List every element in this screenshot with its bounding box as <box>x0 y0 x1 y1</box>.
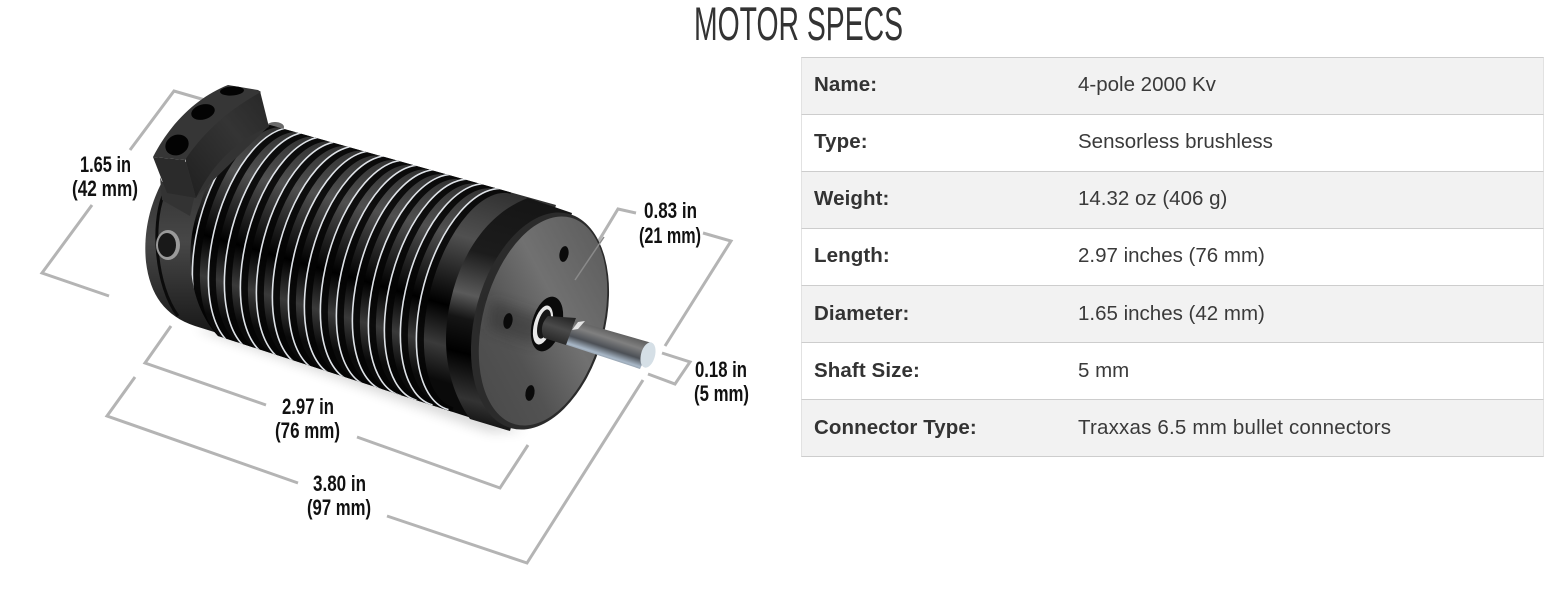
mounting block foot <box>160 127 268 216</box>
row: diameter <box>801 285 1544 342</box>
front face <box>457 202 629 440</box>
dimension: motor diameter <box>42 91 205 296</box>
mounting block lower side <box>153 157 196 198</box>
dimension lines <box>42 91 731 563</box>
label: 1.65 in: 1.65 in <box>80 152 131 177</box>
collar groove <box>157 196 178 316</box>
front cap <box>446 198 572 431</box>
row: shaft size: 5 mm <box>1078 359 1129 382</box>
row: connector type <box>801 399 1544 457</box>
row: length: Length: <box>814 244 890 267</box>
mounting holes in block <box>162 86 244 159</box>
label: 42 mm: (42 mm) <box>72 176 138 201</box>
dimension line across face <box>575 237 604 280</box>
specs table <box>801 57 1544 457</box>
front face rim <box>448 197 632 445</box>
mounting block front <box>185 91 269 198</box>
finned body <box>190 125 556 424</box>
shaft <box>564 320 652 369</box>
cooling fins <box>192 125 511 412</box>
mounting holes <box>502 245 570 402</box>
row: weight <box>801 171 1544 228</box>
label: 3.80 in: 3.80 in <box>313 471 366 496</box>
label: 0.83 in: 0.83 in <box>644 198 697 223</box>
row: type: Type: <box>814 130 868 153</box>
row: shaft size: Shaft Size: <box>814 359 920 382</box>
row: name <box>801 57 1544 114</box>
mounting block top <box>153 85 261 160</box>
row: length <box>801 228 1544 285</box>
bearing ring <box>529 303 557 347</box>
dimension: shaft size <box>648 353 690 384</box>
motor shadow <box>195 325 525 432</box>
shaft collar <box>542 316 576 345</box>
rear bolt <box>156 230 180 260</box>
shaft flat mark <box>572 321 585 330</box>
row: type <box>801 114 1544 171</box>
dimension labels <box>72 152 749 520</box>
label: 0.18 in: 0.18 in <box>695 357 747 382</box>
face highlight band <box>488 300 545 345</box>
label: 21 mm: (21 mm) <box>639 223 701 248</box>
label: 97 mm: (97 mm) <box>307 495 371 520</box>
label: 5 mm: (5 mm) <box>694 381 749 406</box>
rear bolt head <box>158 233 176 257</box>
row: type: Sensorless brushless <box>1078 130 1273 153</box>
row: length: 2.97 inches (76 mm) <box>1078 244 1265 267</box>
label: 2.97 in: 2.97 in <box>282 394 334 419</box>
row: connector type: Traxxas 6.5 mm bullet connectors <box>1078 416 1391 439</box>
row: name: Name: <box>814 73 877 96</box>
dimension: overall length <box>107 377 643 563</box>
dimension: can length <box>145 326 528 488</box>
row: weight: 14.32 oz (406 g) <box>1078 187 1227 210</box>
bearing <box>525 293 569 355</box>
dimension: bolt spacing <box>575 209 731 346</box>
row: diameter: Diameter: <box>814 302 909 325</box>
row: connector type: Connector Type: <box>814 416 977 439</box>
motor illustration <box>145 85 658 445</box>
shaft tip <box>638 341 658 369</box>
bearing centre <box>534 308 554 340</box>
row: diameter: 1.65 inches (42 mm) <box>1078 302 1265 325</box>
label: 76 mm: (76 mm) <box>275 418 340 443</box>
collar knob behind block <box>266 122 284 132</box>
rear collar <box>145 135 270 340</box>
row: name: 4-pole 2000 Kv <box>1078 73 1216 96</box>
row: weight: Weight: <box>814 187 889 210</box>
row: shaft size <box>801 342 1544 399</box>
